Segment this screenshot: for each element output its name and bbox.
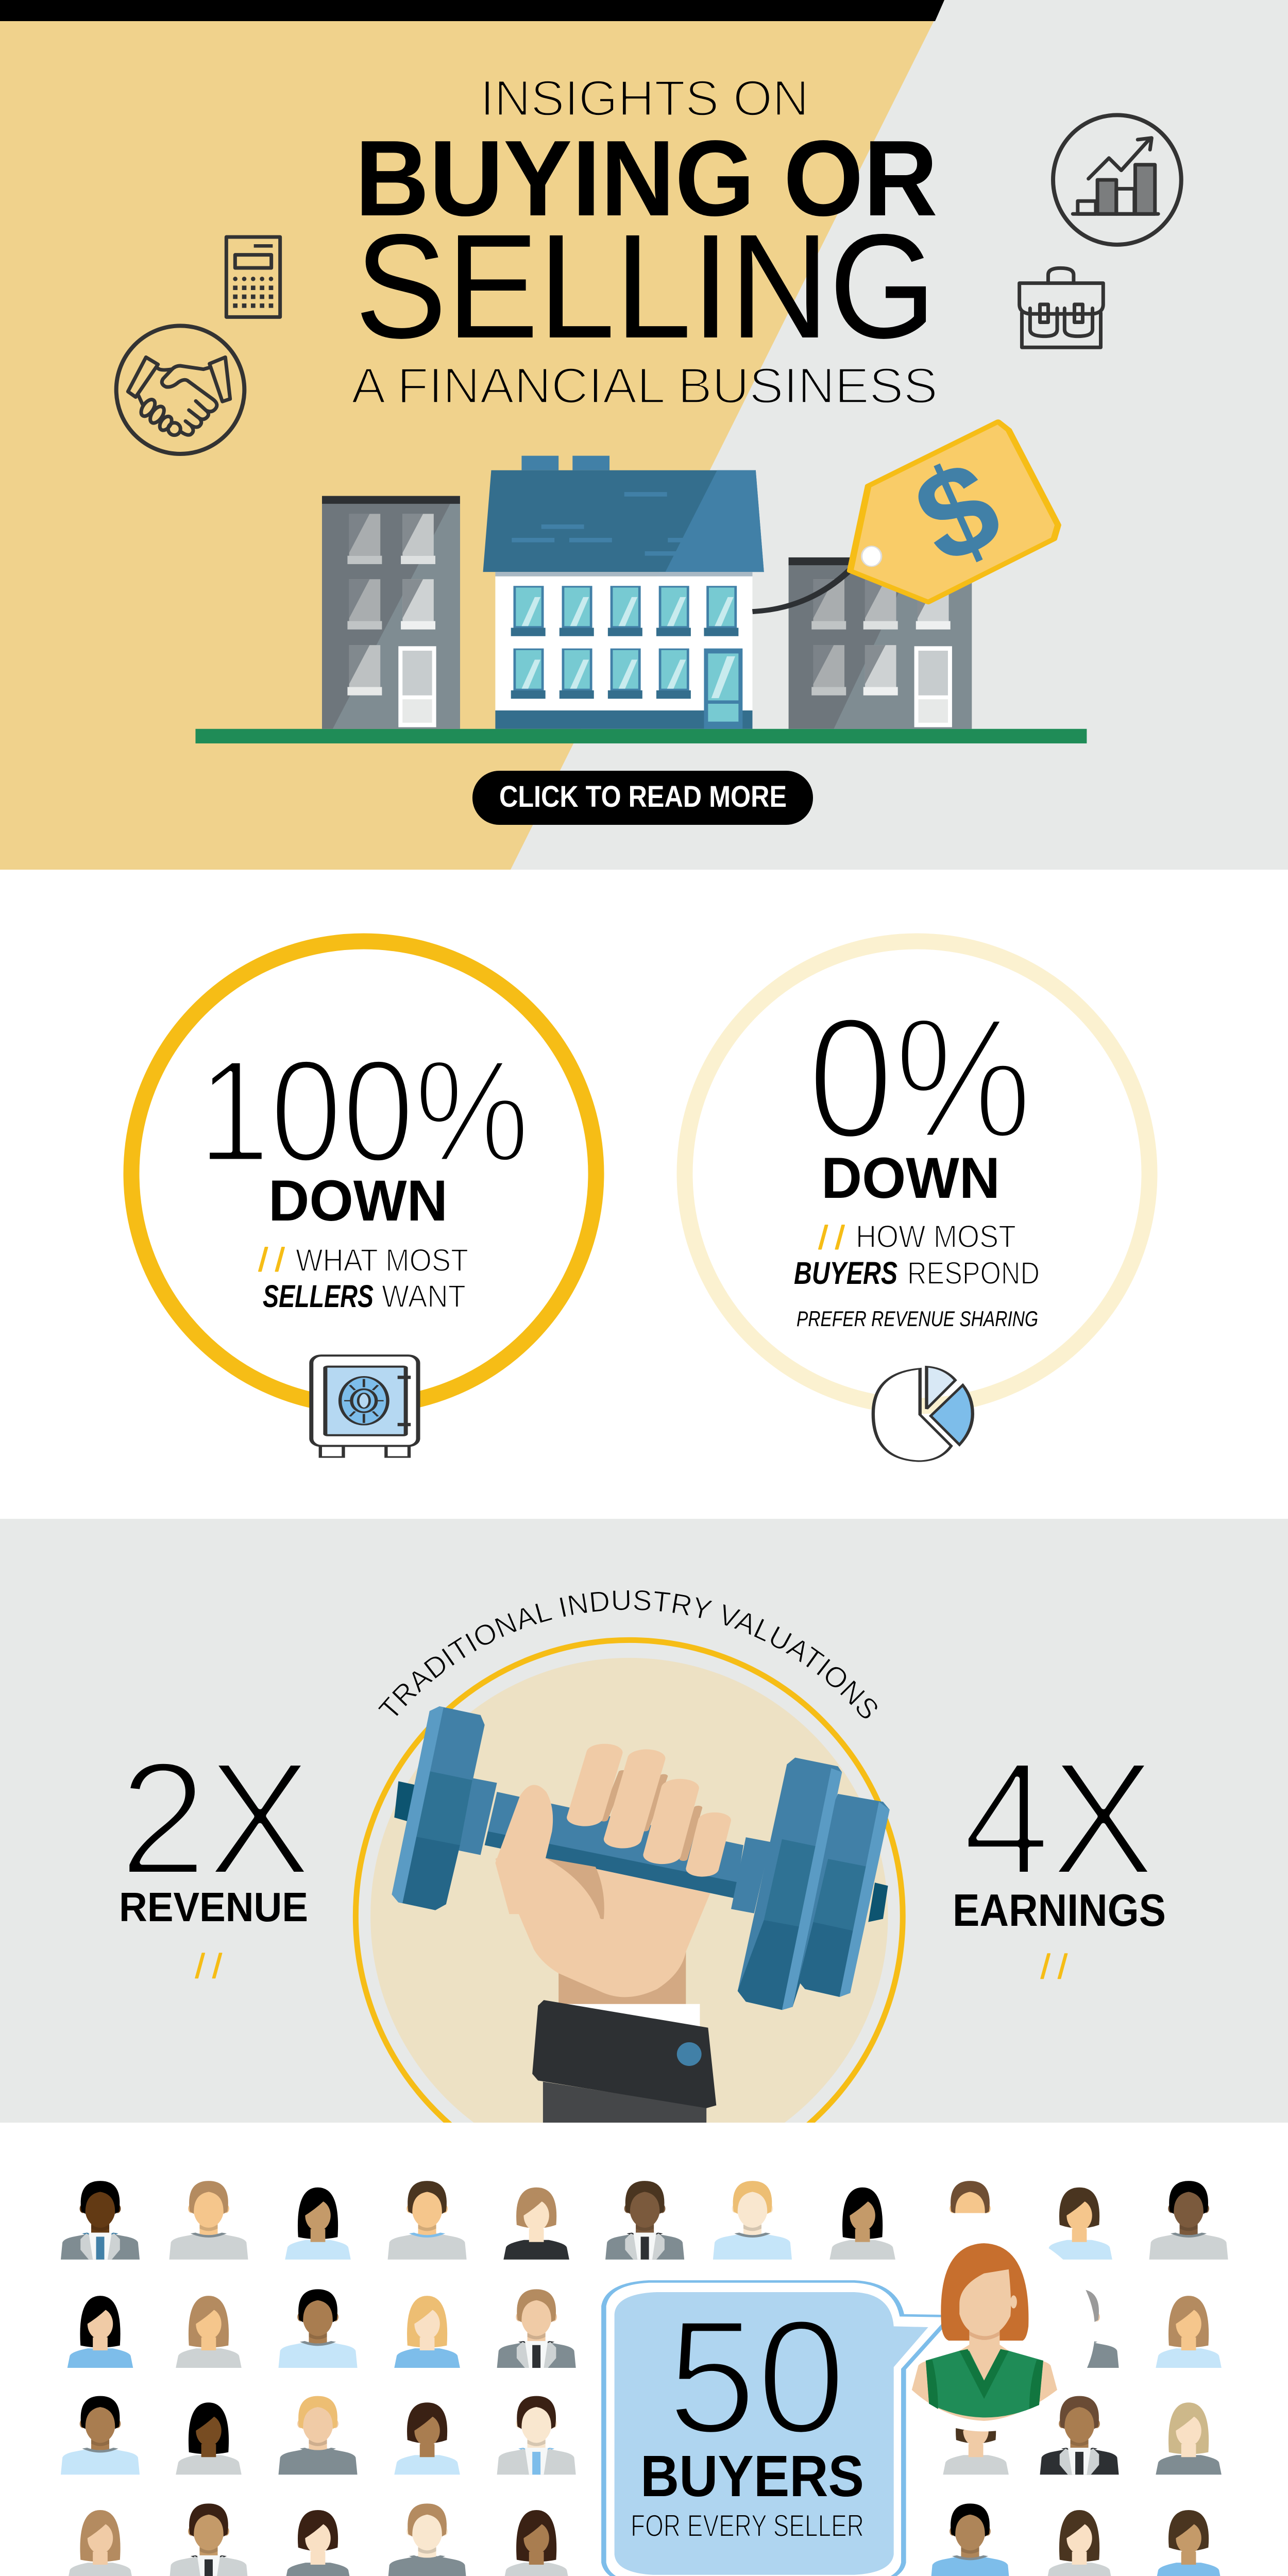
text: prefer revenue sharing: PREFER REVENUE SHARING	[796, 1307, 1038, 1331]
stat: 100%: 100%	[198, 1029, 530, 1192]
dumbbell bar	[394, 1778, 888, 1922]
ground strip	[195, 729, 1087, 743]
panel: 50 buyers	[0, 2123, 1288, 2576]
title: buying or: BUYING OR	[355, 118, 938, 239]
palm	[496, 1858, 710, 1997]
palm shadow	[546, 1858, 604, 1919]
row 4	[67, 2503, 1222, 2576]
slashes: //	[819, 1220, 852, 1256]
woman with red hair	[912, 2243, 1057, 2421]
button: click to read more: CLICK TO READ MORE	[499, 780, 787, 814]
backdrop circle	[370, 1658, 888, 2174]
speech bubble	[604, 2281, 951, 2576]
slashes: //	[259, 1242, 292, 1278]
stat: 4X: 4X	[962, 1728, 1156, 1909]
row 1	[61, 2181, 1228, 2262]
label: down: DOWN	[821, 1146, 1000, 1210]
cuff button	[677, 2042, 702, 2066]
title: selling: SELLING	[355, 204, 936, 369]
label: down: DOWN	[268, 1168, 448, 1233]
shirt cuff	[567, 2004, 700, 2028]
people grid	[61, 2181, 1228, 2576]
button: click to read more	[472, 771, 813, 825]
arc heading: TRADITIONAL INDUSTRY VALUATIONS	[378, 1590, 877, 1719]
icon: calculator outline	[226, 237, 280, 317]
wrist	[558, 1952, 686, 2009]
price tag string	[752, 570, 850, 612]
text: how most: HOW MOST	[856, 1219, 1016, 1254]
title: a financial business: A FINANCIAL BUSINESS	[351, 358, 938, 414]
left plate	[392, 1706, 485, 1910]
price tag	[850, 421, 1058, 602]
title: a financial business	[352, 368, 935, 403]
slashes: //	[195, 1947, 230, 1985]
row 2	[67, 2289, 1222, 2368]
ring: buyer	[685, 941, 1149, 1406]
white halo	[873, 2229, 1095, 2431]
icon: briefcase	[1020, 268, 1103, 347]
stat: 50: 50	[667, 2286, 846, 2467]
icon: growth chart in circle	[1053, 115, 1181, 245]
slashes: //	[1041, 1947, 1075, 1986]
text: what most: WHAT MOST	[296, 1243, 468, 1278]
right plates	[738, 1757, 890, 2010]
label: earnings: EARNINGS	[953, 1885, 1166, 1936]
panel: down payment	[0, 870, 1288, 1519]
icon: handshake in circle	[116, 326, 244, 454]
text: respond: RESPOND	[907, 1256, 1040, 1291]
illustration: street with buildings	[195, 421, 1087, 743]
label: buyers: BUYERS	[640, 2444, 864, 2509]
stat: 2X: 2X	[119, 1728, 312, 1909]
panel: traditional valuations	[0, 1519, 1288, 2123]
ring	[352, 1637, 906, 2123]
text: want: WANT	[382, 1279, 466, 1314]
icon: safe	[311, 1355, 418, 1457]
jacket cuff	[532, 2000, 716, 2108]
illustration: hand lifting dumbbell	[352, 1637, 906, 2123]
dollar sign on tag: $	[895, 431, 1019, 592]
left building	[322, 496, 460, 729]
text: sellers: SELLERS	[263, 1279, 374, 1314]
text: for every seller: FOR EVERY SELLER	[631, 2509, 864, 2543]
row 3	[61, 2396, 1222, 2475]
text: buyers: BUYERS	[794, 1256, 897, 1291]
stat: 0%: 0%	[807, 981, 1032, 1174]
panel: hero	[0, 0, 1288, 870]
right building	[789, 557, 972, 729]
tag eyelet	[862, 546, 882, 566]
title: a financial business: A FINANCIAL BUSINESS	[351, 358, 938, 414]
jacket sleeve	[543, 2082, 706, 2123]
thumb	[495, 1785, 553, 1914]
ring: seller	[131, 941, 596, 1406]
fingers	[585, 1753, 715, 1869]
title: insights on: INSIGHTS ON	[480, 70, 809, 126]
icon: pie chart	[873, 1367, 973, 1461]
main white house	[483, 456, 764, 729]
label: revenue: REVENUE	[119, 1884, 308, 1930]
